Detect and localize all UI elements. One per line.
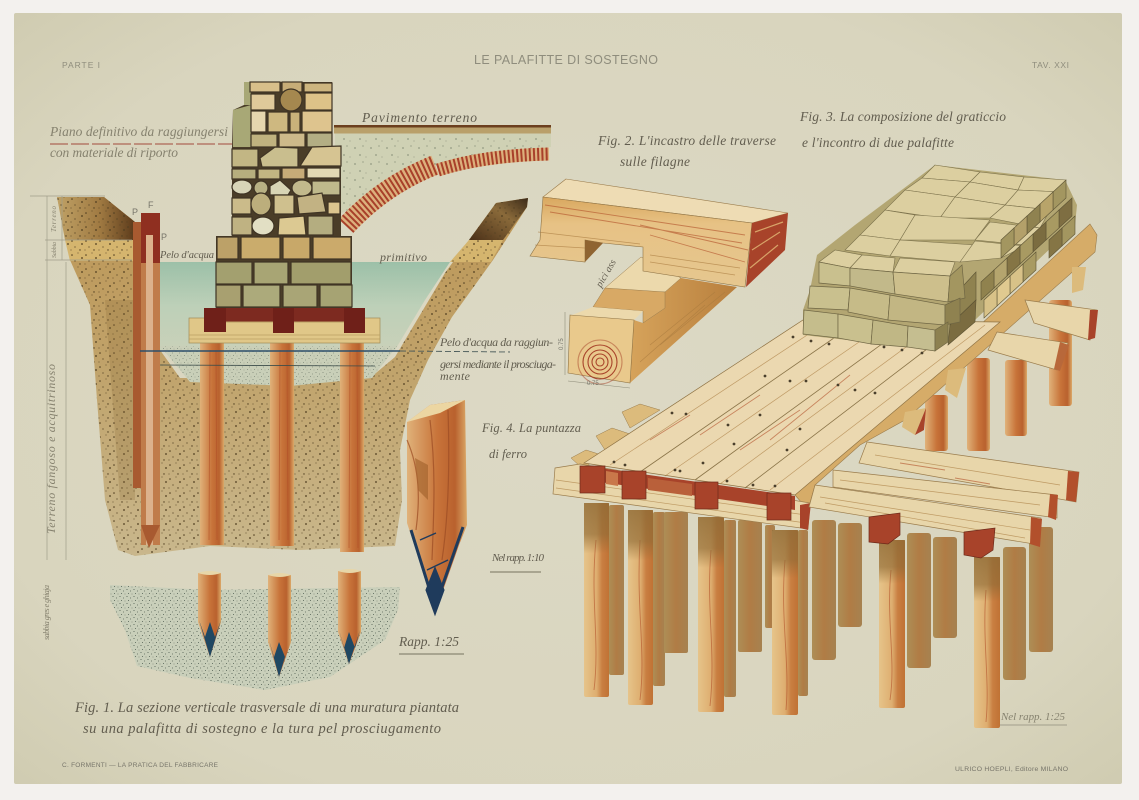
label: pavimento terreno: Pavimento terreno — [361, 110, 477, 125]
pavement and fill layer — [334, 125, 551, 214]
caption: fig 1: su una palafitta di sostegno e la tura pel prosciugamento — [83, 721, 441, 737]
label: rapp 1:25 — [398, 634, 464, 654]
label: pelo d'acqua da raggiungersi: mente — [440, 369, 471, 383]
iron shoe — [411, 527, 463, 612]
gravel bed below water — [160, 346, 397, 386]
label: fig 4 puntazza di ferro — [481, 421, 581, 461]
caption: fig 3 — [799, 109, 1006, 150]
three foundation piles — [200, 343, 364, 552]
caption: fig 2 — [597, 133, 776, 169]
caption: fig 1 — [74, 700, 459, 737]
right side blocks — [948, 180, 1075, 345]
label: pelo d'acqua primitivo: primitivo — [379, 250, 427, 264]
plank end grains — [580, 466, 811, 530]
caption: fig 3: Fig. 3. La composizione del graticcio — [799, 109, 1006, 124]
left stubs of transverse beams — [571, 404, 660, 468]
label: vertical soil dimensions — [42, 206, 58, 640]
dimension marks: pici ass — [594, 258, 619, 290]
label: vertical soil dimensions: Terreno — [50, 206, 58, 232]
label: pelo d'acqua da raggiungersi — [439, 335, 556, 383]
panel: fig 4 iron pile shoe detail — [407, 400, 467, 613]
label: rapp 1:25: Rapp. 1:25 — [398, 634, 459, 649]
back piles — [609, 505, 1053, 697]
front row lower — [803, 310, 948, 351]
water of the basin — [156, 262, 450, 350]
soil section around the cofferdam — [57, 197, 528, 556]
sheet piling P F P: F — [148, 200, 154, 210]
label: scale 1:10: Nel rapp. 1:10 — [491, 552, 544, 564]
header: title and plate marks: PARTE I — [62, 60, 100, 70]
sheet piling P F P: P — [132, 207, 138, 217]
dimension marks: 0.75 — [559, 338, 565, 350]
label: fig 4 puntazza di ferro: di ferro — [489, 447, 527, 461]
label: pelo d'acqua da raggiungersi: gersi mediante il prosciuga- — [440, 357, 556, 371]
label: scale 1:10 — [490, 552, 544, 572]
timber grillage under wall — [189, 308, 380, 343]
dimension marks: 0.75 — [587, 381, 599, 387]
label: scale 1:25: Nel rapp. 1:25 — [1000, 711, 1066, 723]
label: piano definitivo: con materiale di riporto — [50, 145, 178, 160]
sheet piling P F P — [132, 200, 167, 548]
footer credits: C. FORMENTI — LA PRATICA DEL FABBRICARE — [62, 762, 219, 769]
brick arch — [346, 154, 549, 226]
lower beam — [568, 257, 737, 384]
front row middle — [808, 286, 960, 325]
back piles upper right — [925, 300, 1072, 451]
footer credits — [62, 762, 1068, 773]
label: vertical soil dimensions: Terreno fangoso e acquitrinoso — [44, 364, 58, 534]
label: vertical soil dimensions: Sabbia — [52, 242, 58, 258]
label: pelo d'acqua primitivo — [159, 250, 427, 264]
stone block pile — [803, 165, 1077, 351]
panel: fig 3 piling grid perspective — [553, 165, 1098, 728]
front cross beam — [553, 464, 810, 529]
panel: fig 2 joint of beams — [530, 179, 788, 388]
label: pelo d'acqua primitivo: Pelo d'acqua — [159, 250, 214, 261]
label: pelo d'acqua da raggiungersi: Pelo d'acqua da raggiun- — [439, 335, 553, 349]
caption: fig 3: e l'incontro di due palafitte — [802, 135, 954, 150]
label: piano definitivo — [49, 124, 232, 160]
label: fig 4 puntazza di ferro: Fig. 4. La puntazza — [481, 421, 581, 435]
front piles — [584, 503, 1000, 728]
three pile tips — [198, 569, 361, 677]
deck nails — [613, 336, 923, 487]
header: title and plate marks: TAV. XXI — [1032, 60, 1069, 70]
dimension marks — [559, 258, 630, 388]
header: title and plate marks: LE PALAFITTE DI SOSTEGNO — [474, 53, 658, 67]
top face blocks — [819, 165, 1066, 276]
far cross beams and beam ends — [902, 267, 1098, 435]
header: title and plate marks — [62, 53, 1069, 70]
long beam under deck — [795, 224, 1097, 510]
sheet piling P F P: P — [161, 232, 167, 242]
plank deck — [584, 320, 1000, 495]
right palafitta beams — [809, 442, 1079, 558]
label: vertical soil dimensions: sabbia gres e ghiaja — [42, 585, 51, 640]
front row upper — [819, 262, 965, 302]
stone wall masonry — [216, 82, 352, 308]
label: piano definitivo: Piano definitivo da raggiungersi — [49, 124, 228, 139]
caption: fig 2: Fig. 2. L'incastro delle traverse — [597, 133, 776, 148]
caption: fig 2: sulle filagne — [620, 154, 690, 169]
panel: pile tips in ground — [110, 569, 400, 690]
caption: fig 1: Fig. 1. La sezione verticale trasversale di una muratura piantata — [74, 700, 459, 716]
footer credits: ULRICO HOEPLI, Editore MILANO — [955, 766, 1068, 773]
water level lines — [30, 196, 510, 560]
upper beam — [530, 179, 788, 287]
panel: fig 1 vertical section of wall on piles — [30, 82, 551, 560]
